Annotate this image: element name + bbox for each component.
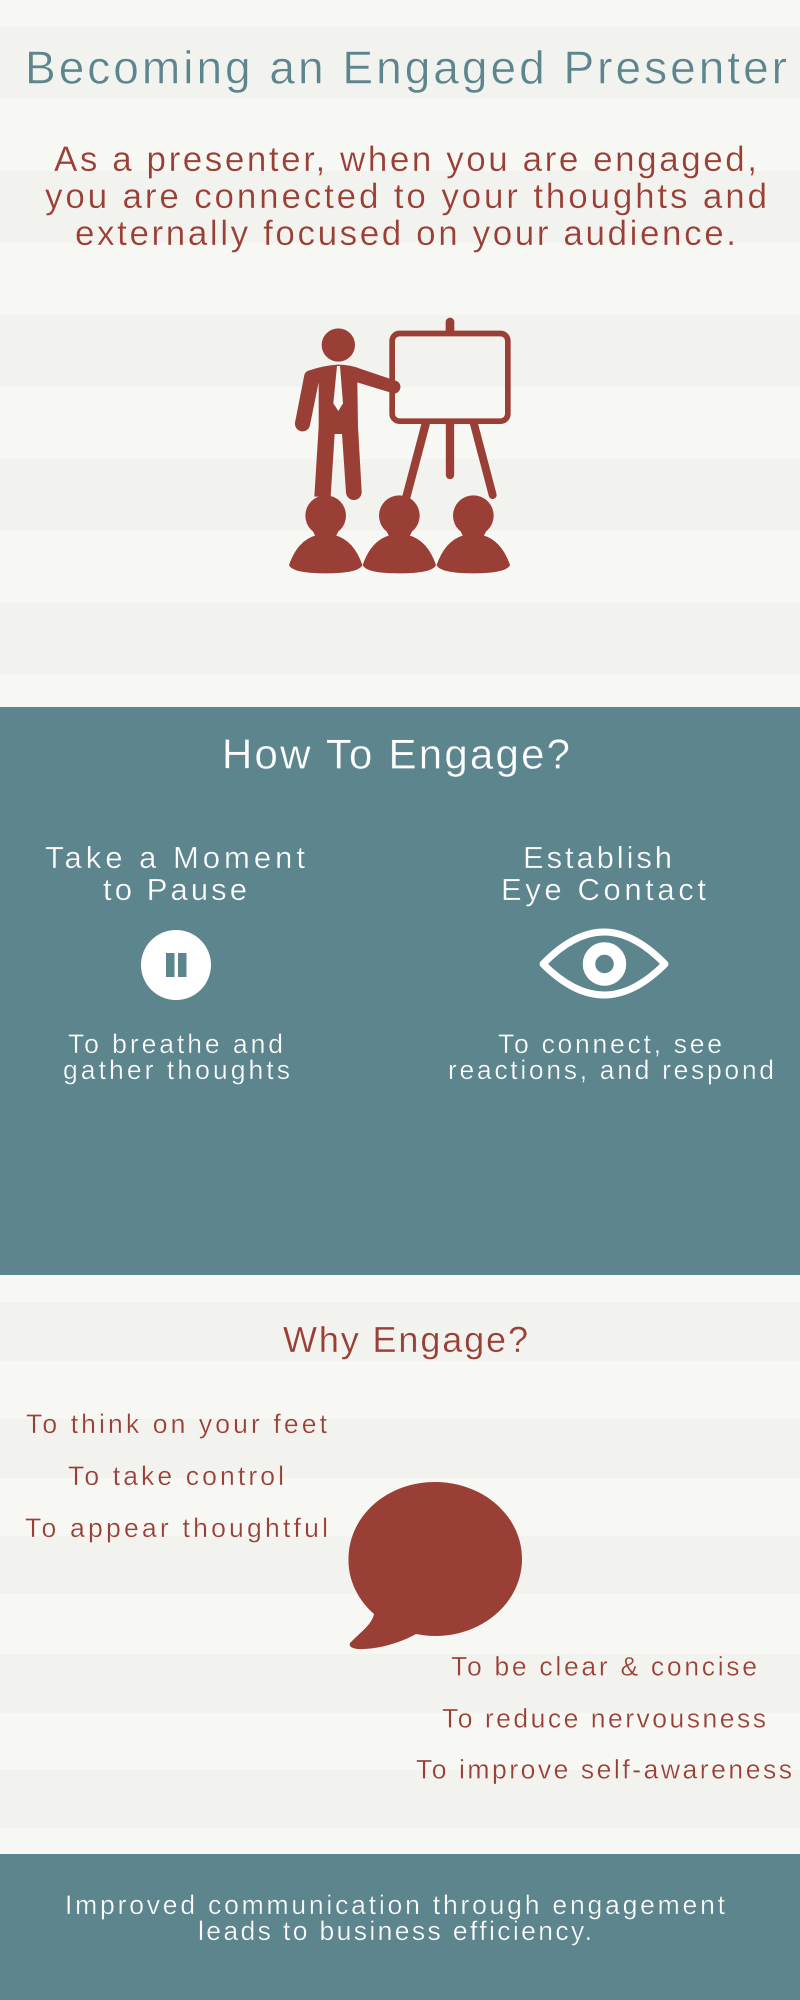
intro text block <box>45 140 767 253</box>
footer text: leads to business efficiency. <box>198 1916 592 1946</box>
right list of reasons: To improve self-awareness <box>416 1754 792 1784</box>
intro text block: you are connected to your thoughts and <box>45 177 767 216</box>
left list of reasons <box>25 1409 328 1543</box>
heading: how to engage: How To Engage? <box>222 730 570 778</box>
description: pause: gather thoughts <box>63 1055 290 1085</box>
icon: presenter at easel with audience <box>289 322 510 573</box>
column: establish eye contact <box>448 840 774 1085</box>
easel board <box>392 322 508 498</box>
right list of reasons <box>416 1652 792 1784</box>
right list of reasons: To reduce nervousness <box>442 1704 766 1734</box>
footer panel <box>0 1854 800 2000</box>
icon: eye <box>543 932 665 995</box>
subheading: eye contact <box>501 840 706 907</box>
intro text block: externally focused on your audience. <box>75 214 736 253</box>
subheading: eye contact: Establish <box>523 840 672 875</box>
right list of reasons: To be clear & concise <box>451 1652 757 1682</box>
title: Becoming an Engaged Presenter <box>25 42 787 94</box>
description: pause <box>63 1029 290 1085</box>
icon: pause button <box>141 930 211 1000</box>
footer text: Improved communication through engagement <box>65 1890 726 1920</box>
icon: speech bubble <box>348 1482 522 1649</box>
panel: how to engage <box>0 707 800 1275</box>
subheading: eye contact: Eye Contact <box>501 872 706 907</box>
left list of reasons: To appear thoughtful <box>25 1513 328 1543</box>
audience <box>289 495 510 573</box>
intro text block: As a presenter, when you are engaged, <box>54 140 757 179</box>
description: pause: To breathe and <box>68 1029 283 1059</box>
description: eye contact: To connect, see <box>498 1029 722 1059</box>
description: eye contact: reactions, and respond <box>448 1055 774 1085</box>
presenter figure <box>295 328 400 500</box>
subheading: pause: Take a Moment <box>45 840 305 875</box>
left list of reasons: To take control <box>68 1461 284 1491</box>
description: eye contact <box>448 1029 774 1085</box>
subheading: pause: to Pause <box>103 872 247 907</box>
subheading: pause <box>45 840 305 907</box>
footer text <box>65 1890 726 1946</box>
left list of reasons: To think on your feet <box>26 1409 328 1439</box>
column: take a moment to pause <box>45 840 305 1085</box>
heading: why engage: Why Engage? <box>283 1319 528 1360</box>
